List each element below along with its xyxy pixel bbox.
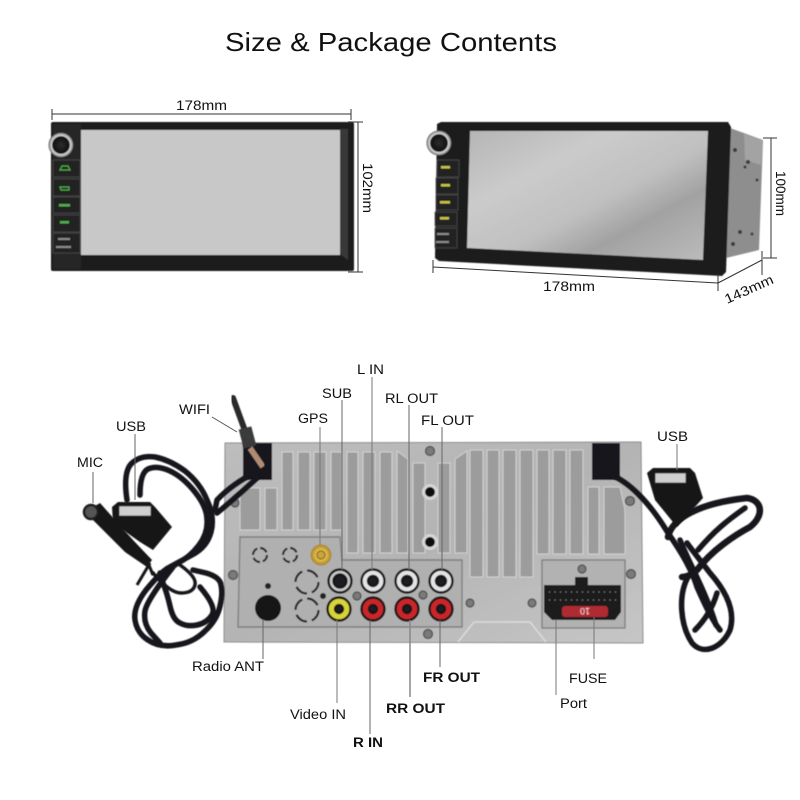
dimension: height 100mm bbox=[763, 138, 788, 258]
label: USB right: USB bbox=[657, 429, 688, 444]
panel: front view with dimensions bbox=[48, 98, 375, 272]
label: Radio ANT: Radio ANT bbox=[192, 659, 264, 674]
dimension: width 178mm angled bbox=[433, 260, 718, 294]
dimension: depth 143mm bbox=[718, 251, 776, 307]
panel: angled view with dimensions bbox=[426, 122, 788, 307]
label: L IN: L IN bbox=[357, 362, 384, 377]
label: R IN bbox=[353, 620, 383, 750]
label: GPS bbox=[298, 411, 328, 545]
label: SUB: SUB bbox=[322, 386, 352, 401]
dimension: height 102mm bbox=[348, 122, 375, 272]
knockouts and small holes bbox=[253, 548, 318, 622]
panel: rear view of head unit bbox=[224, 442, 643, 643]
label: FUSE bbox=[569, 617, 607, 686]
mounting holes bbox=[424, 486, 436, 548]
WIFI antenna bbox=[233, 398, 263, 467]
label: Video IN: Video IN bbox=[290, 707, 346, 722]
RCA connectors bottom row bbox=[328, 598, 452, 620]
dimension: height 100mm: 100mm bbox=[773, 171, 788, 216]
label: RR OUT bbox=[386, 620, 446, 716]
label: GPS: GPS bbox=[298, 411, 328, 426]
left cable bundle bbox=[126, 457, 260, 646]
lower bevel bbox=[458, 622, 546, 642]
dimension: width 178mm bbox=[52, 98, 351, 120]
chassis plate bbox=[224, 442, 643, 643]
screws bbox=[228, 446, 636, 638]
dimension: depth 143mm: 143mm bbox=[722, 272, 776, 307]
head unit angled view bbox=[426, 122, 763, 276]
label: RR OUT: RR OUT bbox=[386, 701, 446, 716]
label: USB left: USB bbox=[116, 419, 146, 434]
RCA connectors top row bbox=[328, 570, 452, 592]
label: R IN: R IN bbox=[353, 735, 383, 750]
label: Video IN bbox=[290, 620, 346, 722]
title: Size & Package Contents bbox=[225, 27, 557, 57]
black cable boxes bbox=[243, 443, 620, 480]
label: MIC: MIC bbox=[77, 455, 103, 470]
label: WIFI: WIFI bbox=[179, 402, 210, 417]
left USB connector bbox=[112, 502, 172, 550]
dimension: height 102mm: 102mm bbox=[360, 163, 375, 213]
port pins bbox=[549, 592, 617, 600]
label: RL OUT: RL OUT bbox=[385, 391, 438, 406]
mic jack bbox=[84, 503, 153, 585]
label: FR OUT: FR OUT bbox=[423, 670, 481, 685]
input and output recess bbox=[238, 537, 462, 627]
fuse bbox=[562, 606, 608, 617]
label: USB left bbox=[116, 419, 146, 500]
label: USB right bbox=[657, 429, 688, 470]
dimension: width 178mm: 178mm bbox=[176, 98, 227, 113]
label: FUSE: FUSE bbox=[569, 671, 607, 686]
label: FL OUT: FL OUT bbox=[421, 413, 474, 428]
right USB connector bbox=[647, 468, 703, 527]
radio antenna socket bbox=[255, 595, 281, 621]
label: WIFI bbox=[179, 402, 237, 432]
cooling fins bbox=[240, 450, 625, 577]
dimension: width 178mm angled: 178mm bbox=[543, 279, 595, 294]
wiring port bbox=[544, 577, 621, 620]
GPS gold connector bbox=[310, 544, 332, 566]
fuse: 10 bbox=[580, 606, 590, 616]
port recess bbox=[542, 560, 625, 628]
right cable bundle bbox=[608, 474, 760, 649]
label: Port bbox=[556, 620, 587, 711]
label: FR OUT bbox=[423, 620, 481, 685]
label: Radio ANT bbox=[192, 620, 264, 674]
head unit front view bbox=[48, 122, 354, 271]
label: Port: Port bbox=[560, 696, 587, 711]
label: MIC bbox=[77, 455, 103, 503]
